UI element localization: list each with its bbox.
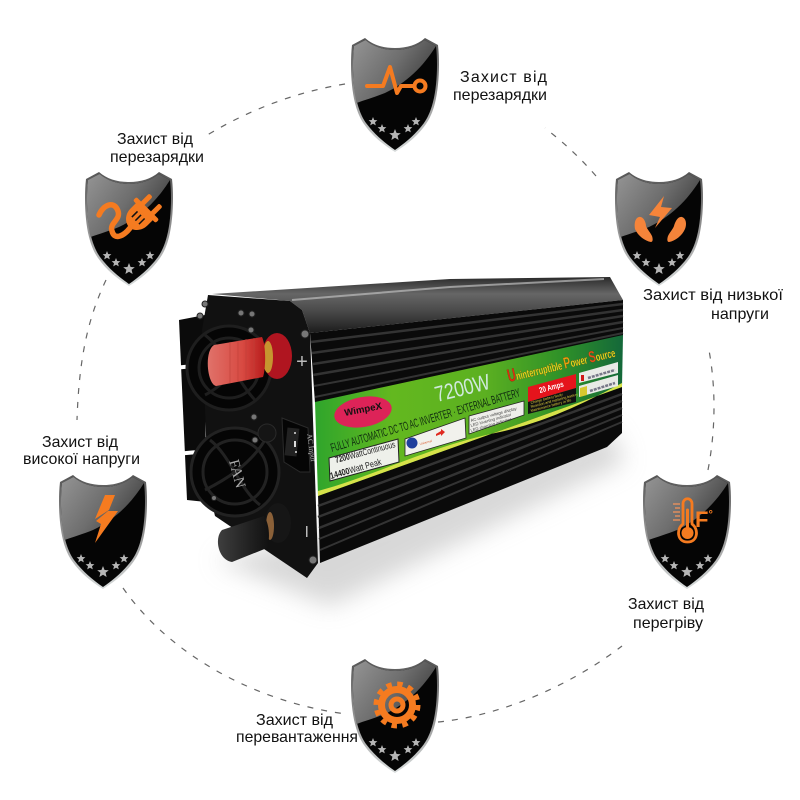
front panel <box>187 295 318 578</box>
label: top right: перезарядки <box>453 87 547 104</box>
label: low voltage: Захист від низької <box>643 287 784 304</box>
product shadow <box>215 430 625 606</box>
ups title: Uninterruptible Power Source <box>505 341 617 386</box>
label: overheat: Захист від <box>628 596 705 613</box>
wattage box: 14400Watt Peak <box>329 457 383 481</box>
lower fan: FAN <box>225 458 248 490</box>
label: top right: Захист від <box>460 69 548 86</box>
fahrenheit mark: ° <box>708 509 713 521</box>
shield: plug <box>85 172 173 286</box>
indicator box: LED charging indicator <box>470 416 513 433</box>
label: high voltage: Захист від <box>42 434 119 451</box>
charge current box: Maintenance battery in life <box>530 398 572 413</box>
wattage box: 7200WattContinuous <box>334 439 397 465</box>
lower cooling grooves <box>318 386 622 563</box>
indicator box: AC output voltage display <box>470 406 518 423</box>
charge current box: Reaction and replacing battery <box>530 392 579 409</box>
charge current box <box>528 374 579 414</box>
indicator box <box>469 401 524 434</box>
dashed protection ring <box>77 84 714 722</box>
lower fan <box>191 428 279 516</box>
automatic inverter line: FULLY AUTOMATIC DC TO AC INVERTER · EXTERNAL BATTERY <box>329 386 522 455</box>
logo: WimpeX <box>343 401 384 419</box>
shield: overload <box>351 659 439 773</box>
certification box <box>405 418 466 456</box>
upper fan <box>187 326 271 410</box>
inverter product photo <box>178 277 623 578</box>
black negative terminal <box>218 503 291 562</box>
icon: thermometer <box>673 499 713 542</box>
icon: gear <box>376 684 418 726</box>
label: high voltage: високої напруги <box>23 451 140 468</box>
minus sign <box>306 526 308 537</box>
indicator box: LED inverting indicator <box>470 412 512 428</box>
wattage box <box>329 439 399 481</box>
certification box: Universal <box>419 439 433 446</box>
ac socket <box>282 418 318 472</box>
shield: low voltage <box>615 172 703 286</box>
icon: pulse line <box>367 67 426 93</box>
fahrenheit mark: F <box>695 507 708 532</box>
charge current box: Charge battery Body <box>530 393 563 405</box>
label: low voltage: напруги <box>711 306 769 323</box>
red positive terminal <box>208 333 292 386</box>
upper cooling grooves <box>310 300 623 403</box>
ac socket: AC Input <box>305 433 318 463</box>
shield: high voltage <box>59 475 147 589</box>
label: overheat: перегріву <box>633 615 703 632</box>
inverter top surface <box>212 277 623 333</box>
plus sign: + <box>296 351 308 373</box>
label: overload: перевантаження <box>236 729 358 746</box>
label: top left: Захист від <box>117 131 194 148</box>
logo <box>332 392 394 432</box>
spec boxes <box>579 362 618 397</box>
icon: lightning <box>95 495 118 543</box>
shield: top overcharge <box>351 38 439 152</box>
mounting bracket <box>178 315 206 502</box>
icon: bolt and hands <box>635 196 686 242</box>
icon: plug <box>99 189 167 238</box>
green label <box>315 335 623 496</box>
power button <box>258 424 276 442</box>
screws <box>197 301 317 564</box>
label: overload: Захист від <box>256 712 334 729</box>
shield: overheat <box>643 475 731 589</box>
power rating: 7200W <box>432 369 493 407</box>
charge current box: 20 Amps <box>538 380 565 395</box>
label: top left: перезарядки <box>110 149 204 166</box>
